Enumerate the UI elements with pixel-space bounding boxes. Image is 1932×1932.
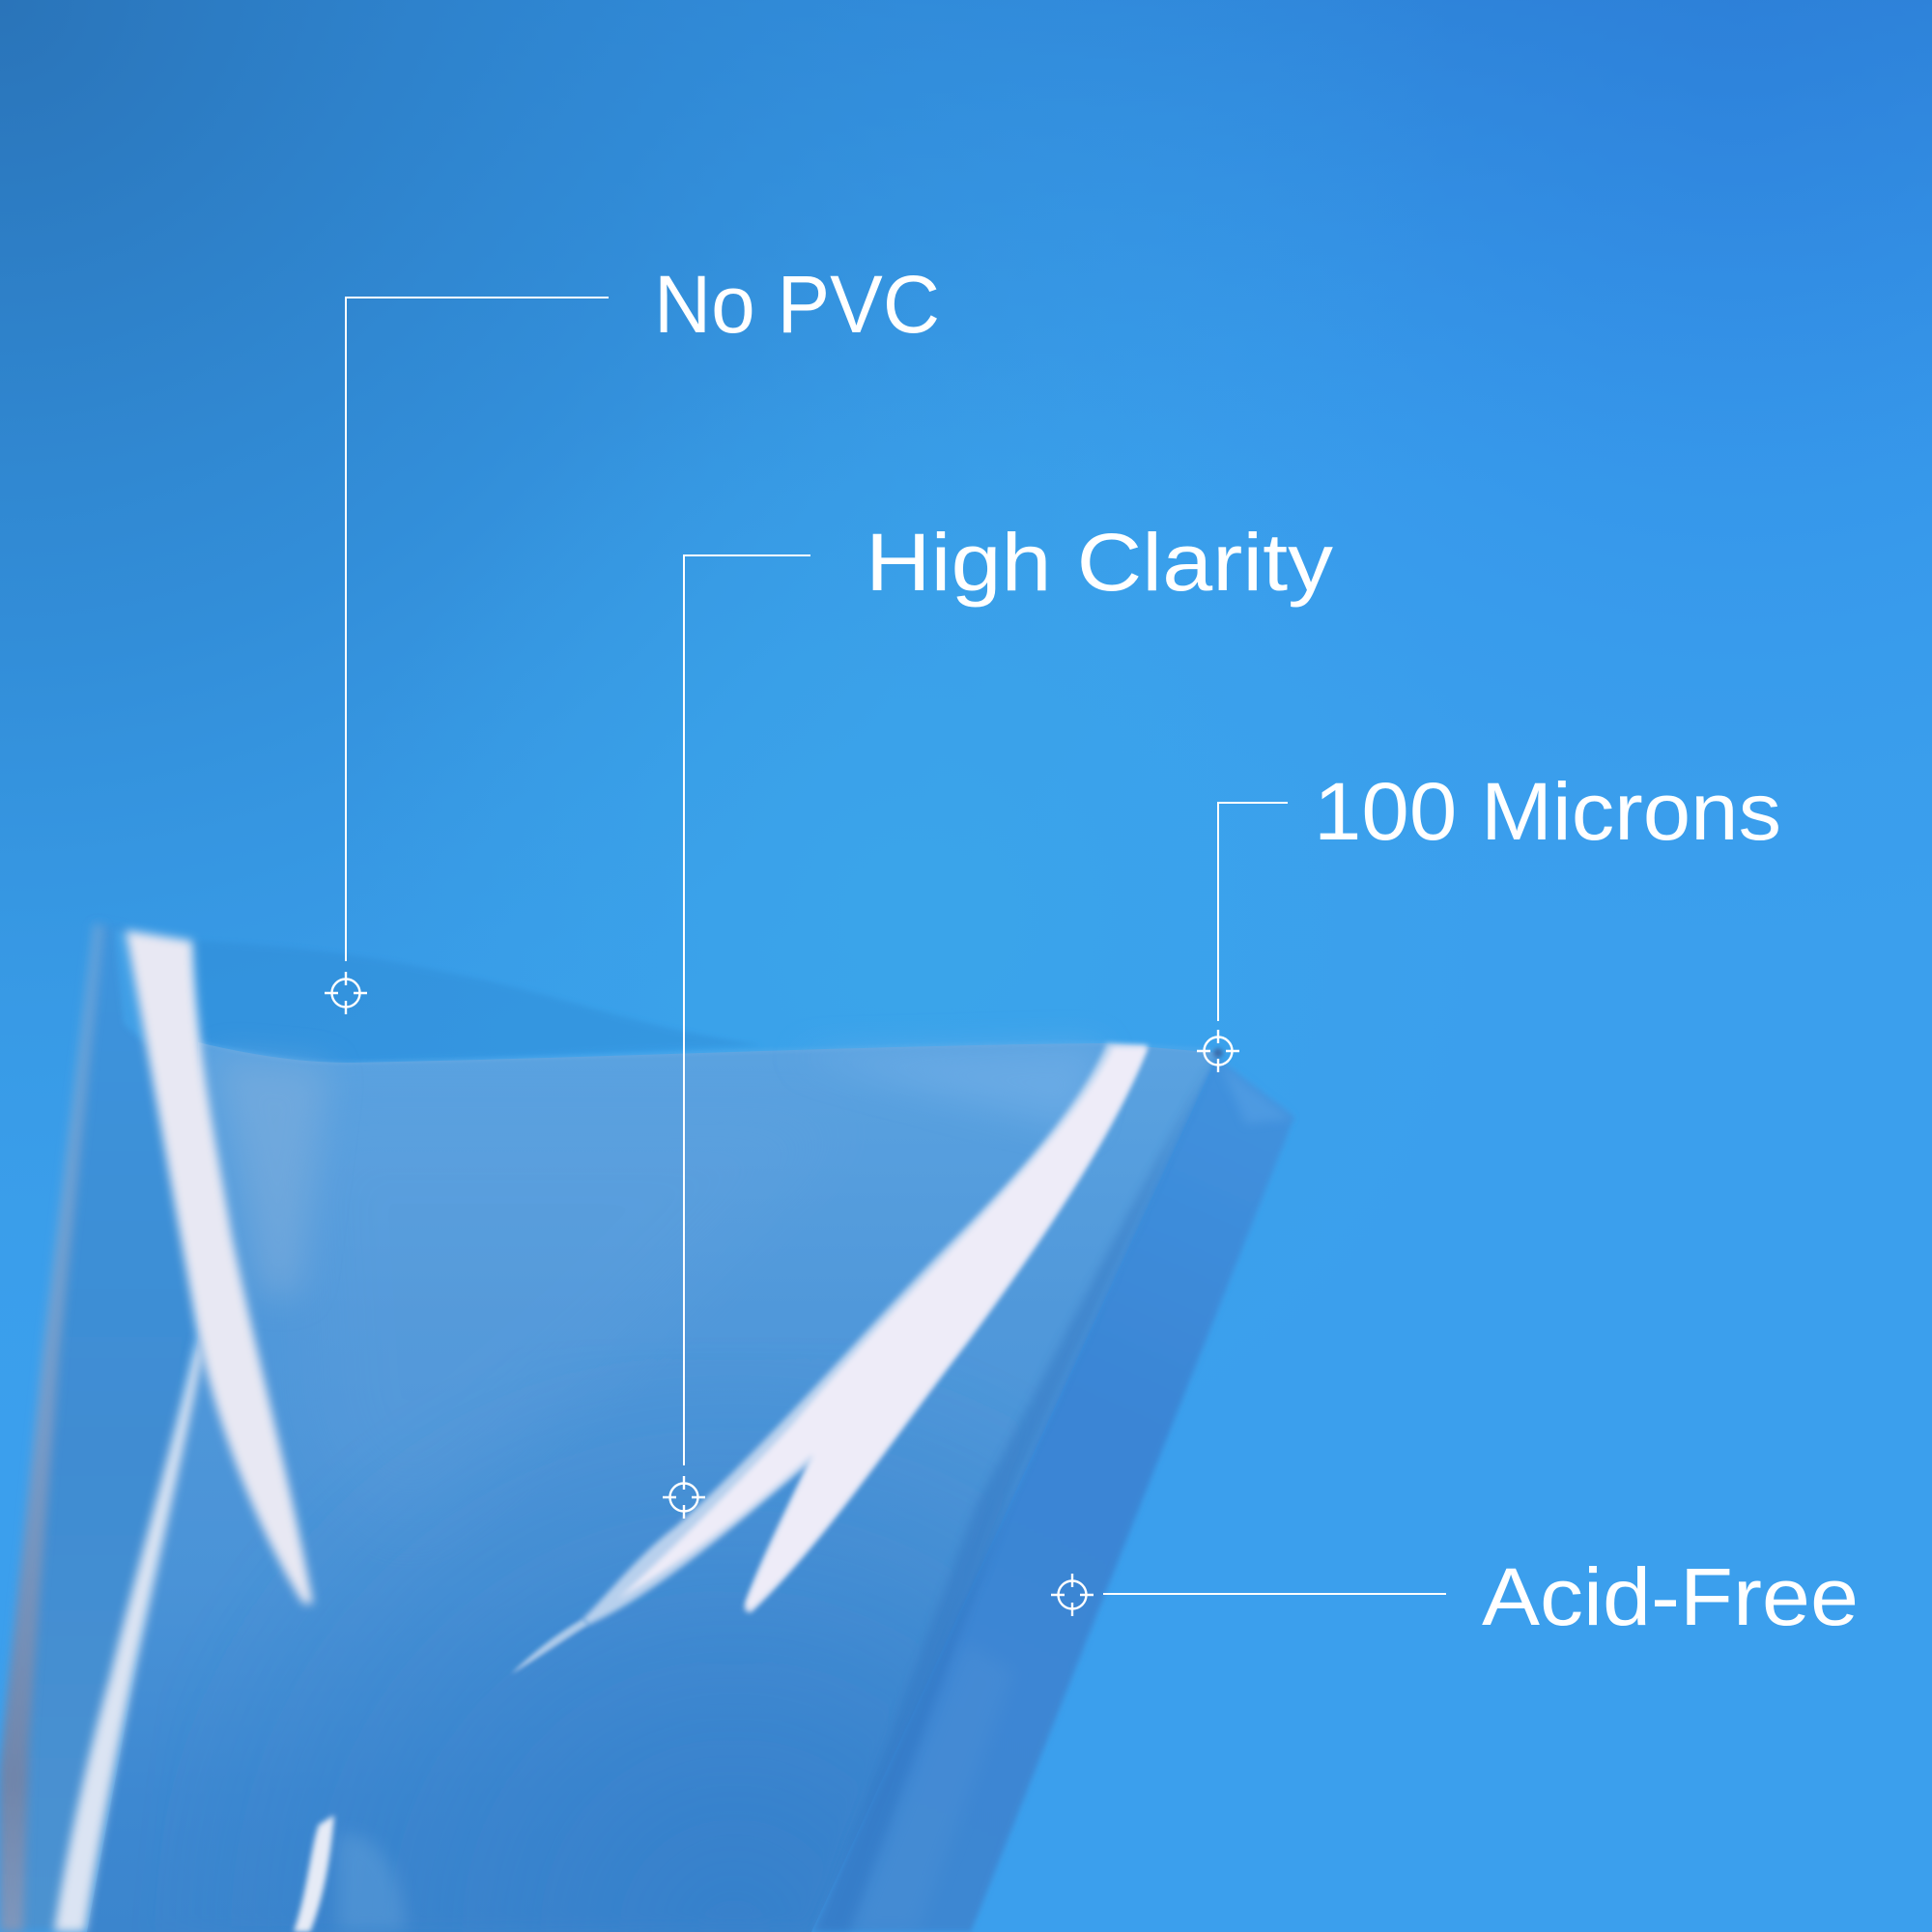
highlight: bottom streak xyxy=(294,1815,334,1932)
front panel top-left light xyxy=(217,1058,328,1294)
left gusset panel xyxy=(0,923,198,1932)
front panel top edge xyxy=(198,1042,1219,1063)
callout: High Clarity xyxy=(663,517,1333,1519)
leader line xyxy=(1218,803,1288,1021)
leader line xyxy=(346,298,609,961)
label: Acid-Free xyxy=(1482,1551,1859,1642)
clear plastic bag photo xyxy=(0,923,1294,1932)
target marker xyxy=(1197,1030,1239,1072)
callout: 100 Microns xyxy=(1197,766,1781,1072)
highlight: left lower streak xyxy=(54,1337,202,1932)
leader line xyxy=(684,555,810,1465)
target marker xyxy=(663,1476,705,1519)
lower right soft fold xyxy=(850,1642,1014,1932)
gusset fade xyxy=(1219,1063,1293,1124)
bright corner of left gusset xyxy=(114,929,147,1045)
leader line xyxy=(1103,1593,1446,1595)
front panel soft light xyxy=(290,1111,869,1546)
lower soft ghost xyxy=(338,1834,406,1932)
highlight: right tail xyxy=(511,1619,588,1674)
front panel xyxy=(87,1042,1219,1932)
target marker xyxy=(1051,1574,1094,1616)
label: High Clarity xyxy=(866,517,1333,608)
target marker xyxy=(325,972,367,1014)
left grey edge xyxy=(0,923,104,1932)
callout: Acid-Free xyxy=(1051,1551,1859,1642)
label: No PVC xyxy=(654,259,940,350)
inner fold shadow xyxy=(816,1059,1213,1932)
highlight: right translucent layer xyxy=(582,1043,1148,1625)
label: 100 Microns xyxy=(1314,766,1781,857)
callout: No PVC xyxy=(325,259,940,1014)
highlight: left main xyxy=(126,930,313,1604)
front panel lower shade xyxy=(145,1352,1063,1932)
corner point xyxy=(1213,1048,1223,1058)
back panel top fold xyxy=(193,941,763,1065)
highlight: right bright core xyxy=(618,1047,1148,1611)
front panel top-right light xyxy=(792,1047,1101,1130)
right gusset xyxy=(811,1057,1294,1932)
